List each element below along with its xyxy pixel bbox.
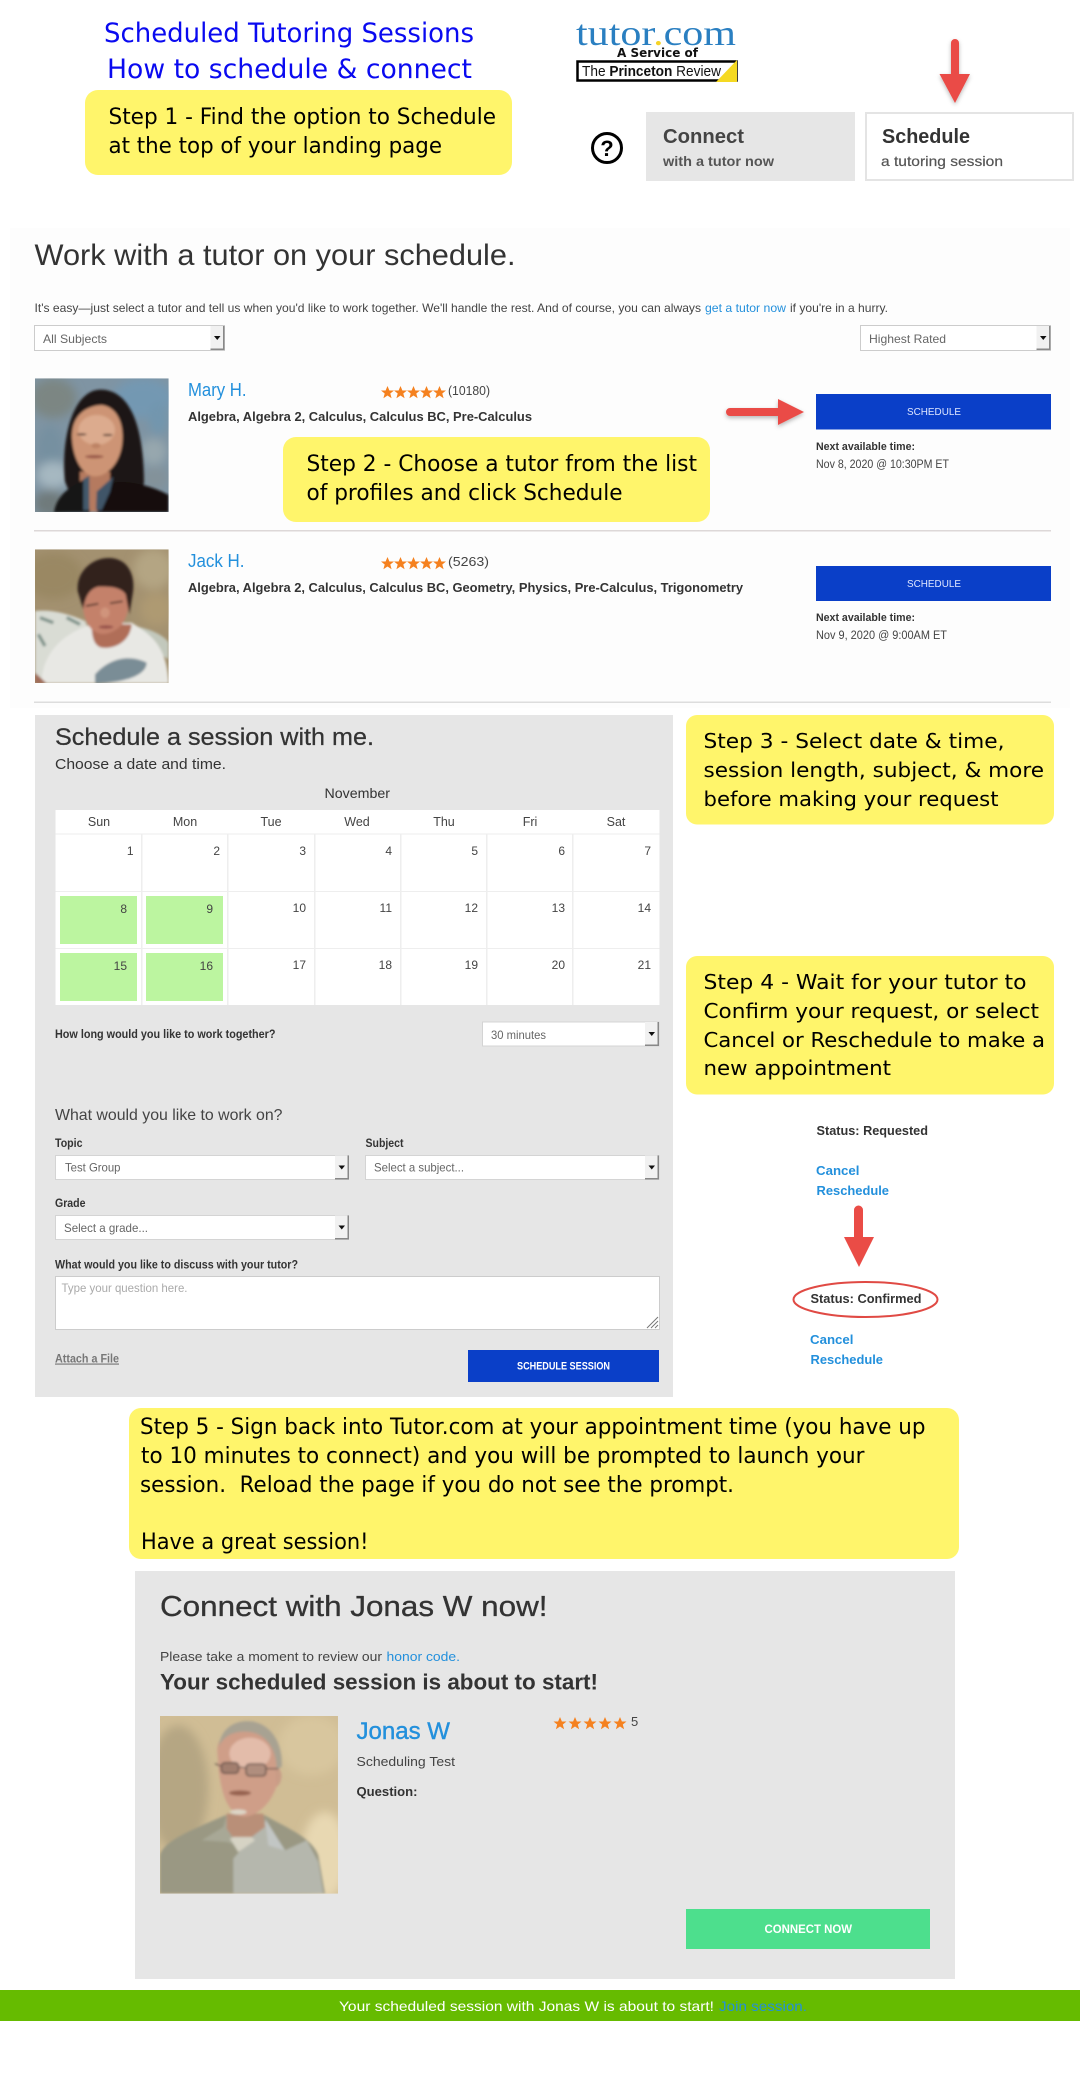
logo: tutor.com, a service of The Princeton Review: The Princeton Review [582,63,721,80]
panel: schedule a tutoring session [866,113,1073,180]
panel: schedule a session form [35,715,673,1397]
session length: 30 minutes [491,1028,546,1042]
honor code line: honor code. [386,1649,460,1664]
intro text: It's easy—just select a tutor and tell us when you'd like to work together. We'll handle the rest. And of course, you can always [34,301,701,315]
calendar: Wed [344,815,370,829]
calendar [56,785,660,1005]
panel: connect with Jonas W [135,1571,955,1979]
topic field: Topic [55,1138,83,1150]
callout: step 1: Step 1 - Find the option to Schedule [108,105,496,130]
honor code line [160,1649,460,1664]
next available time: Mary H. [816,441,949,471]
calendar: 4 [385,844,392,858]
status: confirmed: Status: Confirmed [810,1292,922,1306]
panel: connect with a tutor now: Connect [663,126,744,148]
arrow: requested to confirmed [844,1206,874,1267]
intro text: get a tutor now [705,301,786,315]
session topic: Scheduling Test [356,1754,455,1769]
panel: schedule a tutoring session: Schedule [882,126,970,148]
icon: question mark [592,134,622,162]
callout: step 3: before making your request [704,787,999,811]
calendar: 14 [638,901,651,915]
calendar: 3 [299,844,306,858]
honor code line: Please take a moment to review our [160,1649,383,1664]
tutor card: Jack H.: Algebra, Algebra 2, Calculus, Calculus BC, Geometry, Physics, Pre-Calculus, Trigonometry [188,581,743,595]
button: schedule, Mary H. [816,394,1051,430]
calendar: Thu [433,815,455,829]
callout: step 2: of profiles and click Schedule [306,481,622,506]
tutor card: Mary H.: (10180) [448,383,490,398]
callout: step 3 [686,715,1054,824]
photo: Jack H. [35,549,169,683]
status: confirmed: Cancel [810,1332,854,1347]
status: confirmed: Reschedule [810,1352,883,1367]
callout: step 4: new appointment [704,1056,891,1080]
heading: work with a tutor: Work with a tutor on your schedule. [34,239,516,272]
button: connect now: CONNECT NOW [764,1922,853,1936]
calendar: 2 [213,844,220,858]
calendar: Tue [260,815,282,829]
banner: session about to start [0,1990,1080,2021]
button: schedule, Jack H. [816,566,1051,601]
button: schedule, Jack H.: SCHEDULE [907,579,961,590]
calendar: November [324,785,390,801]
calendar: 19 [465,958,478,972]
calendar: 11 [380,901,392,915]
status: confirmed [794,1282,938,1367]
panel heading: Connect with Jonas W now! [160,1591,548,1623]
callout: step 2: Step 2 - Choose a tutor from the list [306,452,697,477]
calendar: 15 [114,959,127,973]
dropdown: highest rated [860,326,1050,350]
grade field [55,1198,349,1240]
button: schedule session [468,1350,659,1382]
calendar: 16 [200,959,213,973]
grade field: Select a grade... [64,1221,148,1235]
calendar: 5 [471,844,478,858]
topic field: Test Group [65,1160,121,1174]
session length: How long would you like to work together? [55,1029,276,1041]
status: requested: Cancel [816,1163,860,1178]
tutor card: Jack H.: (5263) [448,554,489,569]
status: requested: Reschedule [816,1183,889,1198]
subject field: Subject [366,1138,404,1150]
arrow: red down to schedule [940,39,970,103]
rating value: 5 [631,1714,638,1729]
calendar: 8 [120,902,127,916]
callout: step 3: session length, subject, & more [704,758,1044,782]
rating stars [381,386,446,398]
tutor card: Jack H.: Jack H. [188,551,244,571]
callout: step 4: Cancel or Reschedule to make a [704,1028,1045,1052]
tutor card: Mary H. [188,380,532,424]
button: schedule, Mary H.: SCHEDULE [907,407,961,418]
tutor card: Mary H.: Algebra, Algebra 2, Calculus, Calculus BC, Pre-Calculus [188,410,532,424]
rating stars [554,1717,626,1729]
arrow: red right to schedule button [726,399,804,425]
calendar: 20 [552,958,565,972]
calendar: 6 [558,844,565,858]
button: schedule session: SCHEDULE SESSION [517,1360,610,1372]
callout: step 4: Confirm your request, or select [704,999,1039,1023]
attach a file link: Attach a File [55,1354,119,1366]
subject field [366,1138,659,1180]
logo: tutor.com, a service of The Princeton Review: tutor .com [576,13,736,53]
callout: step 2 [283,437,710,522]
panel: connect with a tutor now [646,112,855,181]
callout: step 5 [129,1408,959,1559]
callout: step 3: Step 3 - Select date & time, [704,729,1004,753]
subject field: Select a subject... [374,1160,464,1174]
next available time: Jack H. [816,612,947,642]
banner: session about to start: Your scheduled session with Jonas W is about to start! [339,1998,714,2014]
calendar: 18 [379,958,392,972]
next available time: Jack H.: Nov 9, 2020 @ 9:00AM ET [816,630,947,642]
topic field [55,1138,349,1180]
dropdown: all subjects: All Subjects [43,332,107,346]
grade field: Grade [55,1198,86,1210]
question label: Question: [356,1784,418,1799]
status: requested [816,1124,928,1198]
panel: schedule a tutoring session: a tutoring session [881,153,1003,169]
tutor card: Jack H. [188,551,743,595]
session length [55,1022,659,1046]
icon: question mark: ? [600,136,614,161]
logo: tutor.com, a service of The Princeton Review: A Service of [617,46,699,60]
question field: Type your question here. [62,1281,188,1295]
calendar: 9 [206,902,213,916]
title [104,18,474,85]
banner: session about to start: Join session. [719,1998,807,2014]
next available time: Mary H.: Nov 8, 2020 @ 10:30PM ET [816,459,949,471]
intro text: if you're in a hurry. [790,301,888,315]
question field [55,1260,660,1330]
next available time: Mary H.: Next available time: [816,441,915,453]
session subheading: Your scheduled session is about to start! [160,1670,598,1694]
tutor name: Jonas W [356,1718,450,1745]
title: Scheduled Tutoring Sessions [104,18,474,49]
next available time: Jack H.: Next available time: [816,612,915,624]
callout: step 4: Step 4 - Wait for your tutor to [704,970,1026,994]
calendar: Sun [88,815,110,829]
title: How to schedule & connect [107,54,472,85]
subheading: what to work on: What would you like to work on? [55,1107,283,1124]
form heading: Schedule a session with me. [55,724,374,751]
calendar: 17 [293,958,306,972]
panel: connect with a tutor now: with a tutor now [662,153,774,169]
dropdown: highest rated: Highest Rated [869,332,946,346]
callout: step 4 [686,956,1054,1094]
calendar: 13 [552,901,565,915]
form subheading: Choose a date and time. [55,756,226,773]
status: requested: Status: Requested [816,1124,928,1138]
dropdown: all subjects [34,326,224,350]
calendar: Fri [523,815,537,829]
calendar: Sat [607,815,626,829]
rating stars [381,557,446,569]
question field: What would you like to discuss with your tutor? [55,1260,298,1272]
callout: step 5: Have a great session! [141,1530,368,1555]
tutor card: Mary H.: Mary H. [188,380,246,400]
calendar: 12 [465,901,478,915]
callout: step 1: at the top of your landing page [108,134,442,159]
calendar: 10 [293,901,306,915]
callout: step 5: session. Reload the page if you do not see the prompt. [140,1473,734,1498]
photo: Jonas W [160,1716,338,1894]
callout: step 5: to 10 minutes to connect) and you will be prompted to launch your [141,1444,865,1469]
callout: step 5: Step 5 - Sign back into Tutor.com at your appointment time (you have up [140,1415,926,1440]
callout: step 1 [85,90,512,175]
calendar: 7 [644,844,651,858]
photo: Mary H. [30,378,173,517]
calendar: Mon [173,815,197,829]
button: connect now [686,1909,930,1949]
logo: tutor.com, a service of The Princeton Review [576,13,737,82]
calendar: 21 [638,958,651,972]
calendar: 1 [127,844,134,858]
